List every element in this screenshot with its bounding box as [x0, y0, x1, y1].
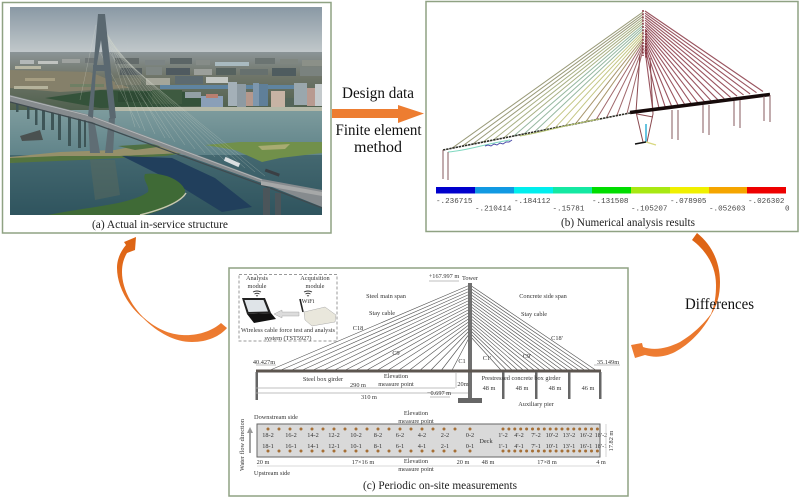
elevation: labels: Auxiliary pier	[518, 401, 555, 408]
colour scale labels: -.15781	[552, 206, 585, 214]
upstream labels: 12-1	[328, 443, 340, 450]
upstream labels: 18-1	[262, 443, 274, 450]
elevation: labels: 310 m	[361, 394, 377, 401]
arrow: data transfer	[274, 310, 299, 318]
upstream labels: 10'-1	[546, 443, 558, 450]
river islands	[10, 142, 322, 163]
downstream labels: 8-2	[374, 432, 382, 439]
downstream labels: 18-2	[262, 432, 274, 439]
colour scale labels: 0	[785, 206, 790, 214]
colour scale labels: -.052603	[709, 206, 746, 214]
label: finite element method: Finite element	[336, 122, 422, 139]
city texture	[14, 58, 322, 104]
elevation: labels: Tower	[462, 275, 479, 282]
downstream labels: 4'-2	[514, 432, 524, 439]
arrow: feedback to structure	[117, 237, 227, 342]
panel: numerical analysis results	[426, 2, 798, 232]
inset: wireless cable force test system: WiFi	[251, 298, 264, 305]
plan view: annotations: 17.82 m	[608, 431, 615, 451]
icon: wifi signals	[253, 291, 312, 296]
plan view: annotations: 4 m	[596, 459, 606, 466]
elevation: deck and piers	[256, 370, 602, 400]
downstream labels: 14-2	[307, 432, 319, 439]
panel: actual in-service structure	[2, 2, 331, 233]
elevation: labels: C1'	[483, 355, 491, 362]
downstream labels: 1'-2	[498, 432, 508, 439]
downstream labels: 7'-2	[531, 432, 541, 439]
right piers	[263, 188, 270, 215]
plan view: annotations: Elevation	[404, 458, 429, 465]
elevation: labels: 290 m	[350, 382, 366, 389]
stay cables	[80, 20, 265, 176]
downstream labels: 16-2	[285, 432, 297, 439]
plan view: annotations: measure point	[398, 466, 434, 473]
plan view: deck: Deck	[479, 438, 493, 445]
upstream labels: 13'-1	[563, 443, 575, 450]
downstream labels: 2-2	[441, 432, 449, 439]
upstream labels: 18'-1	[595, 443, 607, 450]
elevation: labels: −0.697 m	[427, 390, 451, 397]
downstream labels: 13'-2	[563, 432, 575, 439]
elevation: labels: Prestressed concrete box girder	[482, 375, 561, 382]
plan view: annotations: 20 m	[257, 459, 269, 466]
upstream labels: 10-1	[350, 443, 362, 450]
colour scale labels	[436, 198, 790, 214]
left approach piers	[16, 102, 86, 148]
colour scale labels: -.131508	[592, 198, 629, 206]
panel: periodic on-site measurements	[229, 268, 628, 496]
plan view: annotations: Downstream side	[254, 414, 298, 421]
plan view: annotations: Upstream side	[254, 470, 290, 477]
arrow: differences	[631, 233, 720, 358]
upstream labels: 16'-1	[580, 443, 592, 450]
elevation: labels: Steel box girder	[303, 376, 344, 383]
icon: laptop	[242, 298, 276, 323]
plan view: annotations	[239, 410, 615, 477]
upstream labels: 4'-1	[514, 443, 524, 450]
plan view: annotations: Elevation	[404, 410, 429, 417]
inset: wireless cable force test system: module	[248, 283, 267, 290]
elevation: labels: C18'	[551, 335, 563, 342]
tower	[643, 10, 646, 58]
elevation: labels: Stay cable	[521, 311, 547, 318]
downstream labels: 10'-2	[546, 432, 558, 439]
plan view: annotations: 48 m	[482, 459, 494, 466]
inset: wireless cable force test system: WiFi	[302, 298, 315, 305]
piers	[443, 95, 770, 180]
elevation: labels: Concrete side span	[519, 293, 568, 300]
icon: acquisition device	[300, 299, 336, 326]
downstream labels: 6-2	[396, 432, 404, 439]
plan view: annotations: 17×16 m	[352, 459, 374, 466]
deck	[443, 113, 630, 150]
inset: wireless cable force test system: Wireless cable force test and analysis	[241, 327, 336, 334]
right cables	[645, 11, 763, 112]
upstream labels: 8-1	[374, 443, 382, 450]
inset: wireless cable force test system: system (TST5927)	[264, 335, 312, 342]
elevation: stay cables	[268, 285, 597, 371]
downstream labels: 4-2	[418, 432, 426, 439]
elevation: labels	[253, 273, 619, 408]
colour scale labels: -.236715	[436, 198, 473, 206]
elevation: labels: C1	[458, 358, 466, 365]
inset: wireless cable force test system: Acquisition	[300, 275, 331, 282]
plan view: annotations: Water flow direction	[239, 418, 246, 471]
upstream labels: 4-1	[418, 443, 426, 450]
caption a: (a) Actual in-service structure	[92, 217, 228, 231]
upstream labels: 6-1	[396, 443, 404, 450]
measurement points	[268, 429, 598, 451]
finite element model	[443, 10, 770, 180]
upstream labels: 7'-1	[531, 443, 541, 450]
elevation: labels: 46 m	[582, 385, 594, 392]
peninsula	[48, 174, 185, 215]
left cables	[452, 12, 643, 148]
upstream labels	[262, 443, 607, 450]
elevation: labels: 40.427m	[253, 359, 275, 366]
downstream labels: 18'-2	[595, 432, 607, 439]
label: design data: Design data	[342, 85, 414, 102]
caption b: (b) Numerical analysis results	[561, 215, 695, 229]
elevation: labels: 48 m	[483, 385, 495, 392]
upstream labels: 1'-1	[498, 443, 508, 450]
elevation: tower	[458, 283, 482, 403]
downstream labels: 16'-2	[580, 432, 592, 439]
elevation: labels: Steel main span	[366, 293, 407, 300]
upstream labels: 16-1	[285, 443, 297, 450]
elevation: labels: Elevation	[384, 373, 409, 380]
colour scale bar	[436, 187, 786, 194]
label: differences: Differences	[685, 296, 754, 313]
upstream labels: 0-1	[466, 443, 474, 450]
elevation: labels: C9	[392, 350, 400, 357]
downstream labels: 12-2	[328, 432, 340, 439]
label: finite element method: method	[354, 139, 402, 156]
elevation: labels: 48 m	[516, 385, 528, 392]
photo: cable-stayed bridge over river	[10, 7, 322, 215]
inset: wireless cable force test system: module	[306, 283, 325, 290]
colour scale labels: -.078905	[670, 198, 707, 206]
upstream labels: 2-1	[441, 443, 449, 450]
colour scale labels: -.105207	[631, 206, 667, 214]
bridge deck	[10, 95, 322, 207]
elevation: labels: measure point	[378, 381, 414, 388]
elevation: labels: C18	[353, 325, 363, 332]
downstream labels: 10-2	[350, 432, 362, 439]
elevation: labels: 20m	[457, 381, 469, 388]
upstream labels: 14-1	[307, 443, 319, 450]
inset: wireless cable force test system	[239, 274, 337, 342]
tower	[88, 14, 116, 119]
inset: wireless cable force test system: Analysis	[246, 275, 269, 282]
elevation: labels: 35.149m	[597, 359, 619, 366]
elevation: labels: +167.997 m	[429, 273, 459, 280]
tower lower legs	[88, 118, 115, 153]
plan view: annotations: 20 m	[457, 459, 469, 466]
downstream labels: 0-2	[466, 432, 474, 439]
elevation: labels: 48 m	[549, 385, 561, 392]
elevation: dimension lines	[256, 281, 620, 397]
axes	[645, 124, 647, 142]
plan view: annotations: measure point	[398, 418, 434, 425]
plan view: annotations: 17×8 m	[537, 459, 557, 466]
elevation: labels: C9'	[523, 353, 531, 360]
elevation: labels: Stay cable	[369, 310, 395, 317]
colour scale labels: -.026302	[748, 198, 785, 206]
buildings	[228, 82, 322, 107]
label: finite element method	[336, 122, 422, 156]
colour scale labels: -.184112	[514, 198, 551, 206]
bridge shadow	[122, 156, 252, 212]
caption c: (c) Periodic on-site measurements	[363, 478, 517, 492]
downstream labels	[262, 432, 607, 439]
plan view: deck	[257, 424, 607, 457]
arrow: design data	[332, 105, 424, 123]
colour scale labels: -.210414	[475, 206, 512, 214]
